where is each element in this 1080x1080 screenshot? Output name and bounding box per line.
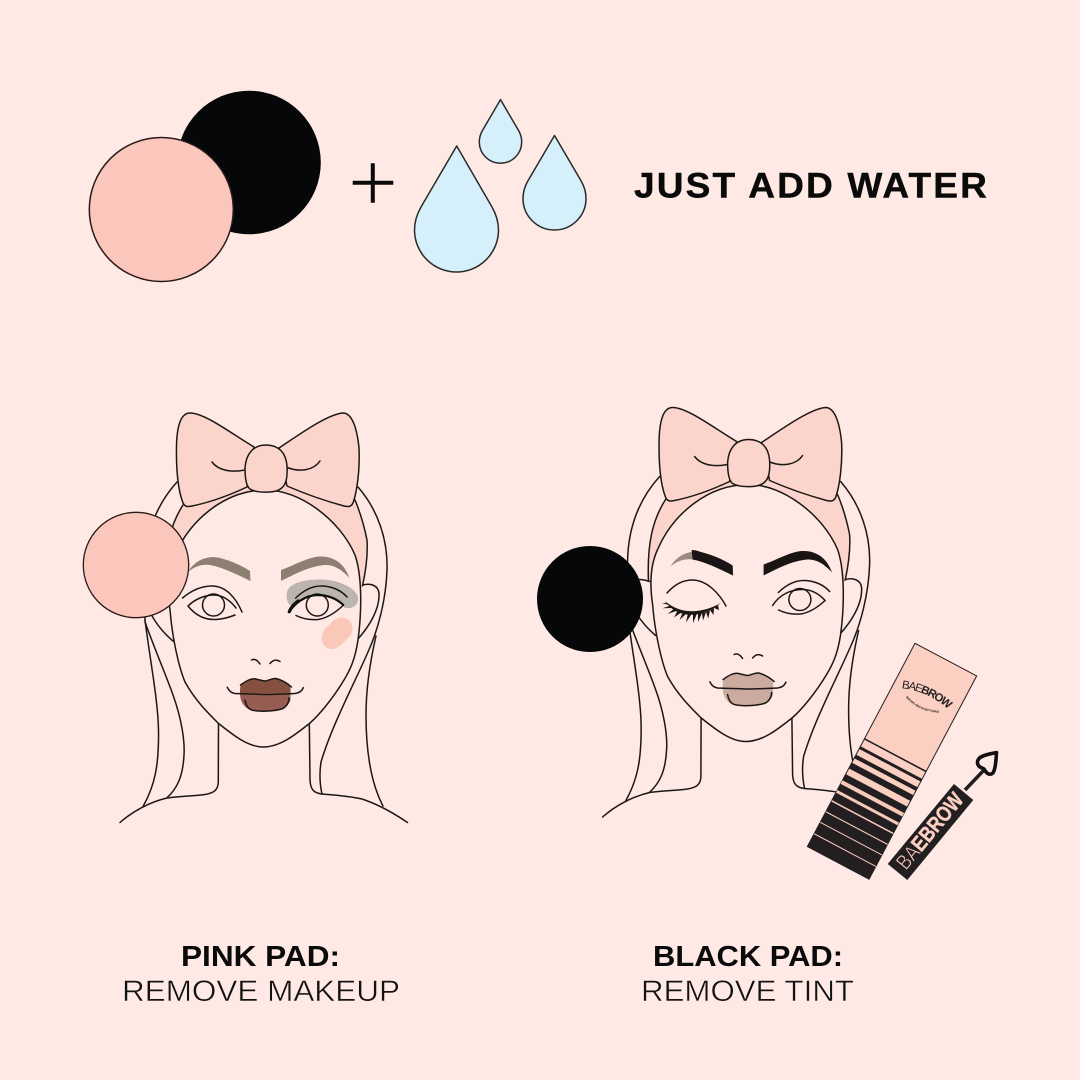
left eye xyxy=(182,586,242,620)
tinted lips xyxy=(710,673,786,706)
closed eye with lashes xyxy=(662,580,726,623)
right eye with liner xyxy=(289,586,347,620)
heading: JUST ADD WATER xyxy=(634,166,989,206)
eyebrows: faded xyxy=(188,556,350,581)
product: brow wand xyxy=(888,752,996,880)
eyeshadow xyxy=(287,579,358,608)
wand logo: BAEBROW xyxy=(891,788,969,874)
eyebrows: tinted xyxy=(671,550,832,576)
icon: plus sign xyxy=(353,163,393,203)
product: tint tube xyxy=(806,642,978,880)
illustration: face with pink pad xyxy=(83,413,408,822)
open eye xyxy=(773,580,830,614)
tube logo: BAEBROW xyxy=(902,680,954,708)
caption: black pad xyxy=(641,941,854,1008)
caption: pink pad xyxy=(122,941,400,1008)
icon: pink pad xyxy=(89,138,233,282)
stripes xyxy=(807,738,926,879)
black pad on face xyxy=(537,546,643,652)
caption: pink pad: REMOVE MAKEUP xyxy=(122,975,400,1008)
blush xyxy=(322,618,352,649)
caption: black pad: REMOVE TINT xyxy=(641,975,854,1008)
caption: pink pad: PINK PAD: xyxy=(181,941,340,973)
pink pad on face xyxy=(83,512,189,618)
icon: black pad xyxy=(177,91,321,234)
illustration: face with black pad xyxy=(537,408,890,817)
icon: water drops xyxy=(414,100,586,272)
tube tagline: BROWS AND EVERYTHING xyxy=(906,696,940,713)
lipstick lips xyxy=(227,678,303,711)
caption: black pad: BLACK PAD: xyxy=(653,941,843,973)
